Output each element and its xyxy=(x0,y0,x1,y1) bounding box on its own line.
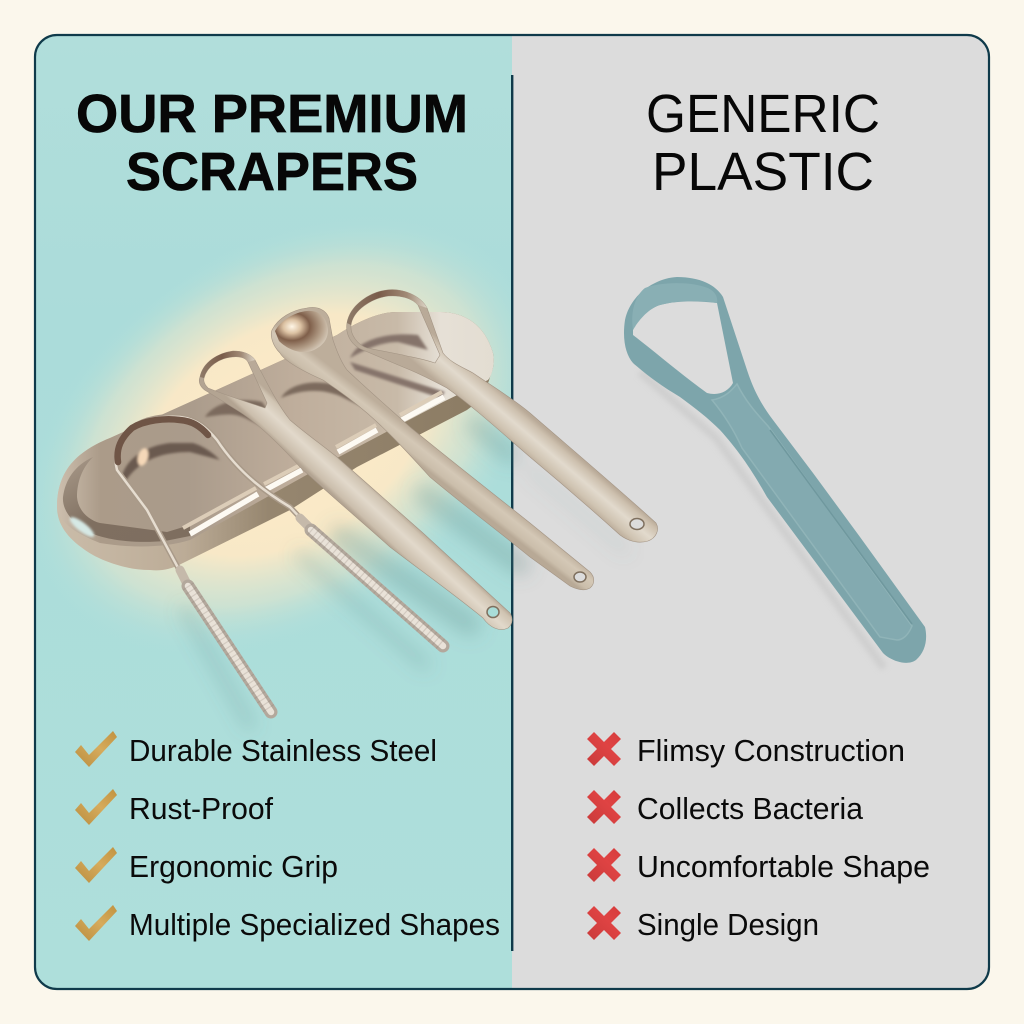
icon: red x xyxy=(587,848,621,882)
scraper shadows xyxy=(185,425,625,725)
icon: red x xyxy=(587,906,621,940)
heading: generic plastic: PLASTIC xyxy=(652,142,874,202)
illustration: generic plastic scraper xyxy=(624,277,926,668)
scraper: loop middle xyxy=(199,351,512,630)
loop ribbon shading xyxy=(347,290,427,325)
icon: red x xyxy=(587,732,621,766)
plastic scraper handle recess xyxy=(712,384,912,640)
heading: our premium scrapers xyxy=(76,84,468,202)
case plate reflections xyxy=(67,334,445,540)
plastic scraper body xyxy=(624,277,926,663)
list: premium benefits xyxy=(75,731,500,942)
benefit: durable stainless steel: Durable Stainless Steel xyxy=(129,734,437,768)
list: generic drawbacks xyxy=(587,732,930,942)
case bright edge strips xyxy=(183,392,444,534)
warm glow behind scrapers xyxy=(54,239,511,630)
column divider xyxy=(511,75,513,951)
illustration: premium steel scraper set xyxy=(57,290,658,725)
benefit: multiple specialized shapes: Multiple Specialized Shapes xyxy=(129,908,500,942)
heading: generic plastic: GENERIC xyxy=(646,84,880,144)
loop ribbon shading xyxy=(200,351,255,378)
scraper: ribbed u-wire front xyxy=(116,417,443,712)
panel: premium scrapers background xyxy=(35,35,512,989)
drawback: flimsy construction: Flimsy Construction xyxy=(637,734,905,768)
drawback: uncomfortable shape: Uncomfortable Shape xyxy=(637,850,930,884)
case left rim shading xyxy=(63,457,190,542)
steel case xyxy=(57,312,494,570)
icon: gold check xyxy=(75,731,117,767)
heading: our premium scrapers: OUR PREMIUM xyxy=(76,84,468,144)
scraper: spoon xyxy=(271,307,594,590)
drawback: collects bacteria: Collects Bacteria xyxy=(637,792,863,826)
drawback: single design: Single Design xyxy=(637,908,819,942)
heading: our premium scrapers: SCRAPERS xyxy=(126,142,418,202)
icon: gold check xyxy=(75,789,117,825)
scraper: loop top right xyxy=(347,290,658,542)
icon: gold check xyxy=(75,847,117,883)
icon: red x xyxy=(587,790,621,824)
plastic scraper inner face xyxy=(632,283,717,330)
benefit: rust-proof xyxy=(75,789,274,826)
benefit: ergonomic grip: Ergonomic Grip xyxy=(129,850,338,884)
panel: generic plastic background xyxy=(512,35,989,989)
plastic scraper shadow xyxy=(640,372,884,668)
icon: gold check xyxy=(75,905,117,941)
benefit: rust-proof: Rust-Proof xyxy=(129,792,274,826)
heading: generic plastic xyxy=(646,84,880,202)
